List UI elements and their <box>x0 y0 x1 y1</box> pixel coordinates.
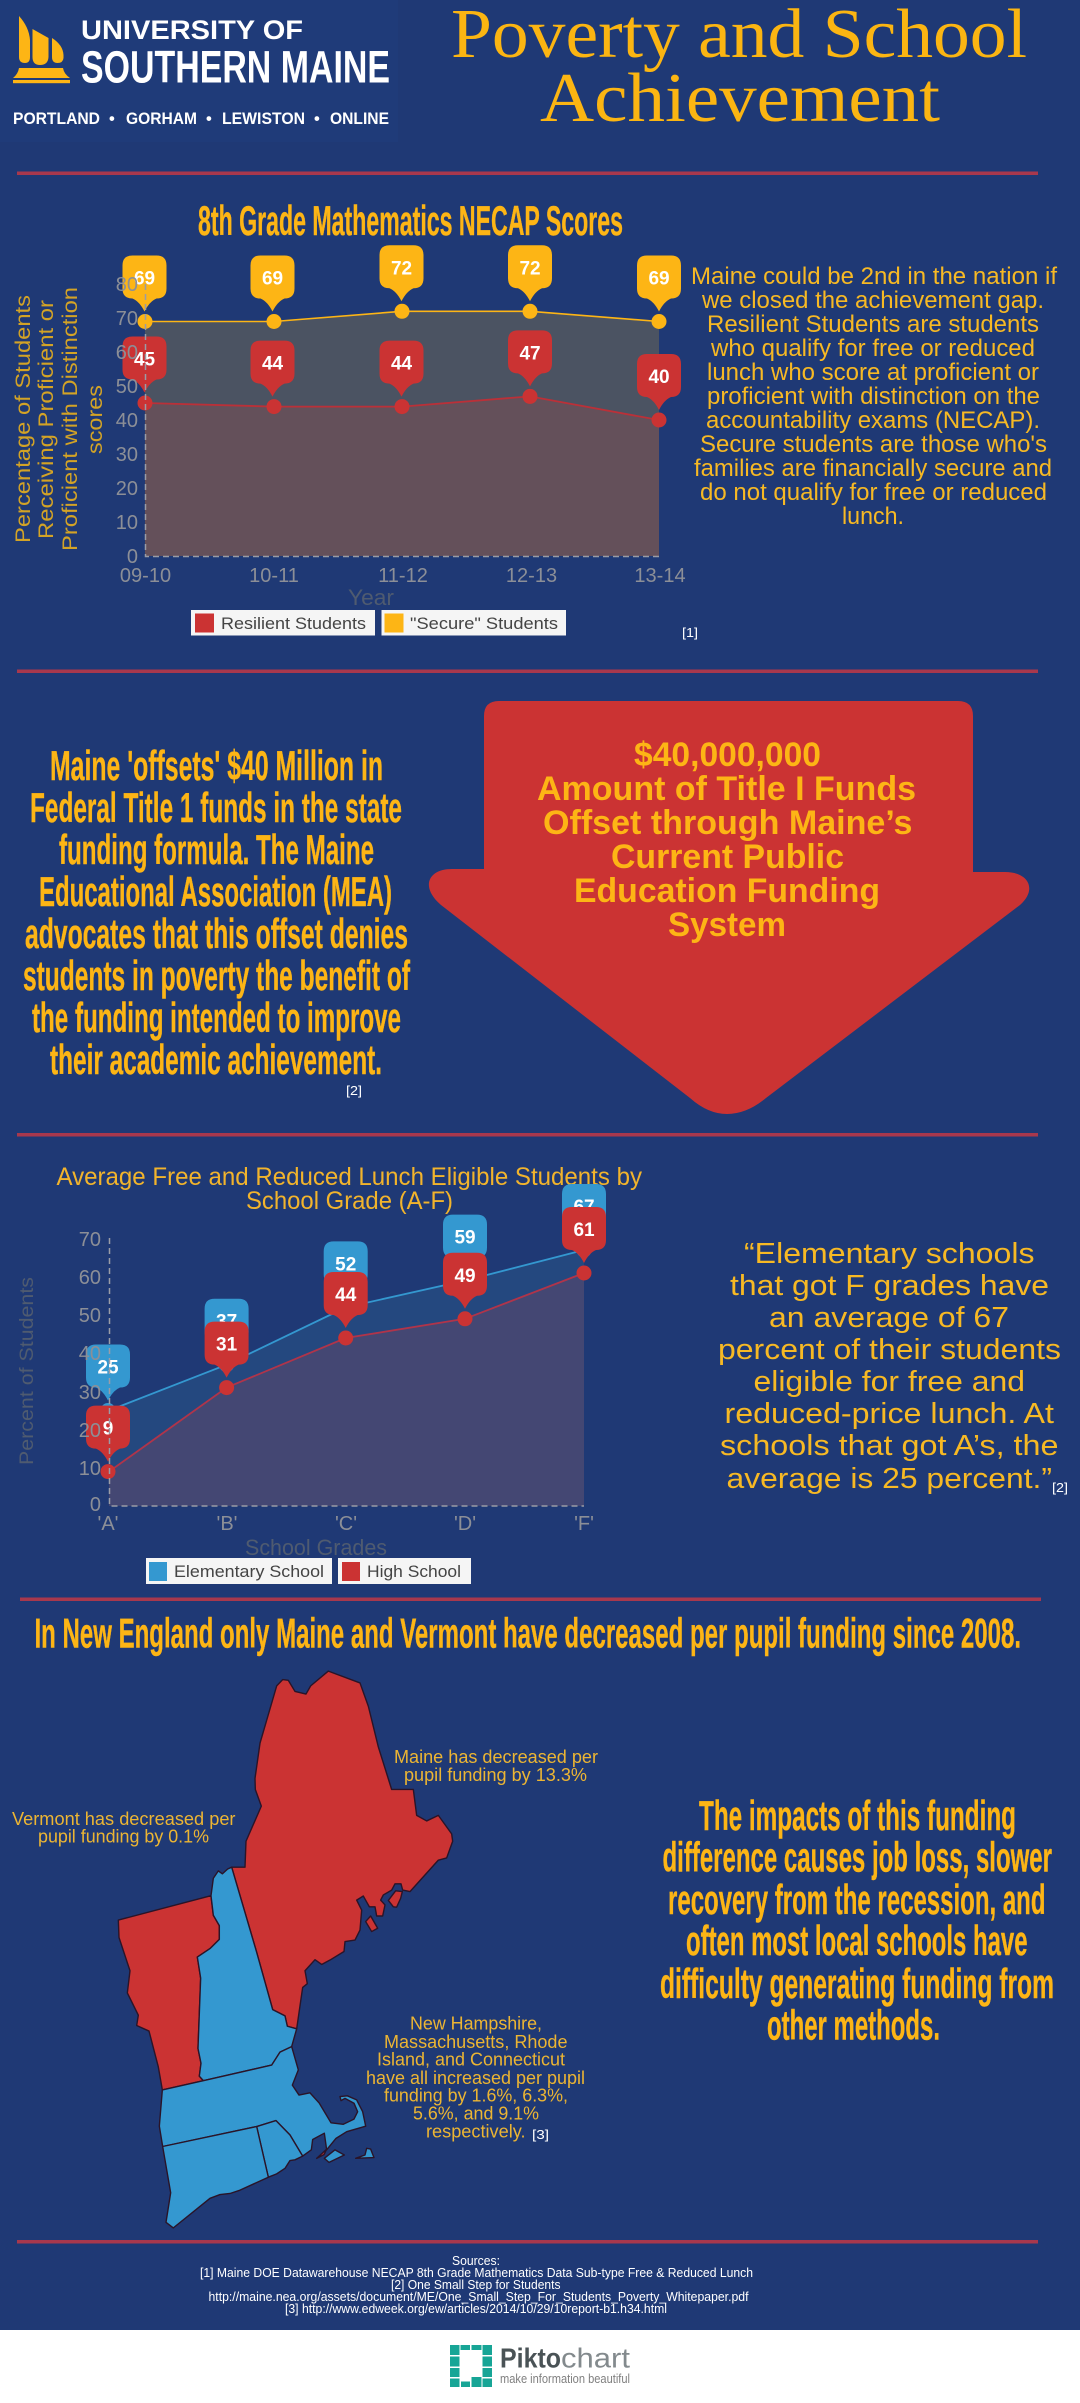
text block: Title 1 offset: Federal Title 1 funds in the state <box>30 784 402 831</box>
sources <box>200 2253 753 2316</box>
map label: other states: have all increased per pupil <box>366 2068 585 2088</box>
map label: Vermont: pupil funding by 0.1% <box>38 1826 209 1846</box>
area chart bands <box>145 311 659 556</box>
high school markers and callouts: 61 <box>573 1220 595 1241</box>
axes and tick labels: 60 <box>79 1267 101 1289</box>
source reference: [3] <box>532 2127 549 2142</box>
text block: funding impacts: other methods. <box>767 2002 940 2048</box>
resilient student markers and callouts <box>122 330 681 428</box>
text block: Title 1 offset: Educational Association (MEA) <box>39 868 392 915</box>
arrow: funds offset callout <box>429 701 1029 1114</box>
text block: elementary schools quote: reduced-price lunch. At <box>724 1398 1054 1430</box>
chart title: Average Free and Reduced Lunch Eligible Students by <box>56 1163 642 1191</box>
panel: NECAP scores chart <box>12 197 698 640</box>
y axis title: Percentage of Students <box>12 295 35 543</box>
text block: elementary schools quote: an average of 67 <box>769 1302 1009 1334</box>
axes and tick labels: 11-12 <box>378 565 428 587</box>
y axis title: Receiving Proficient or <box>35 300 58 539</box>
y axis title: scores <box>84 385 107 454</box>
logo: University of Southern Maine <box>0 0 398 142</box>
axes and tick labels: 20 <box>79 1420 101 1442</box>
axes and tick labels <box>79 1229 594 1535</box>
legend: Elementary School <box>174 1562 324 1581</box>
logo wordmark: SOUTHERN MAINE <box>81 42 390 92</box>
logo wordmark: GORHAM <box>126 110 197 128</box>
text block: resilient students explanation: families are financially secure and <box>694 455 1052 482</box>
secure student markers and callouts: 72 <box>519 258 541 279</box>
axes and tick labels: 10 <box>79 1458 101 1480</box>
logo wordmark: LEWISTON <box>222 110 305 128</box>
x axis title: School Grades <box>245 1535 387 1560</box>
title: Achievement <box>540 60 941 137</box>
text block: resilient students explanation: we closed the achievement gap. <box>701 287 1044 314</box>
sources: [3] http://www.edweek.org/ew/articles/2014/10/29/10report-b1.h34.html <box>285 2301 667 2316</box>
arrow text: Amount of Title I Funds <box>537 770 916 808</box>
axes and tick labels: 'C' <box>335 1513 357 1535</box>
map label: Vermont <box>12 1809 236 1846</box>
text block: resilient students explanation: do not qualify for free or reduced <box>700 479 1047 506</box>
axes and tick labels: 'F' <box>574 1513 594 1535</box>
axes and tick labels: 60 <box>116 342 138 364</box>
axes and tick labels: 12-13 <box>506 565 557 587</box>
arrow text: Education Funding <box>574 872 880 910</box>
source reference: [1] <box>682 625 698 640</box>
map label: other states <box>366 2014 585 2142</box>
elementary school markers and callouts: 25 <box>97 1358 119 1378</box>
text block: funding impacts <box>660 1792 1054 2048</box>
wordmark <box>500 2343 630 2386</box>
legend <box>146 1558 471 1584</box>
axes and tick labels: 10-11 <box>249 565 299 587</box>
source reference: [2] <box>346 1083 362 1098</box>
y axis title <box>12 287 107 551</box>
footer: Piktochart <box>0 2330 1080 2403</box>
axes and tick labels: 50 <box>116 376 138 398</box>
axes and tick labels: 30 <box>116 444 138 466</box>
secure student markers and callouts <box>122 245 681 329</box>
Maine <box>232 1671 453 2029</box>
map label: other states: Massachusetts, Rhode <box>384 2032 568 2052</box>
high school markers and callouts <box>86 1207 606 1479</box>
resilient student markers and callouts: 47 <box>519 343 541 364</box>
wordmark: Pikto <box>500 2343 561 2374</box>
text block: Title 1 offset: advocates that this offset denies <box>25 910 408 957</box>
text block: resilient students explanation: Resilient Students are students <box>707 311 1039 338</box>
text block: Title 1 offset: funding formula. The Maine <box>59 826 374 873</box>
logo wordmark: UNIVERSITY OF <box>81 15 303 45</box>
text block: Title 1 offset: Maine 'offsets' $40 Million in <box>50 742 383 789</box>
map label: Vermont: Vermont has decreased per <box>12 1809 236 1829</box>
axes and tick labels: 70 <box>116 308 138 330</box>
legend: Resilient Students <box>221 614 366 633</box>
Massachusetts <box>159 2047 366 2156</box>
map label: other states: funding by 1.6%, 6.3%, <box>384 2086 568 2106</box>
axes and tick labels: 70 <box>79 1229 101 1251</box>
text block: elementary schools quote: percent of their students <box>718 1334 1061 1366</box>
logo wordmark: • <box>314 110 320 128</box>
logo wordmark: • <box>109 110 115 128</box>
map label: other states: 5.6%, and 9.1% <box>413 2104 539 2124</box>
secure student markers and callouts: 72 <box>391 258 412 279</box>
high school markers and callouts: 9 <box>103 1419 113 1440</box>
source reference: [2] <box>1052 1480 1068 1495</box>
text block: Title 1 offset: the funding intended to improve <box>32 994 401 1041</box>
legend: High School <box>367 1562 461 1581</box>
text block: resilient students explanation: who qualify for free or reduced <box>710 335 1035 362</box>
title <box>451 0 1027 137</box>
text block: elementary schools quote: that got F grades have <box>730 1270 1049 1302</box>
Connecticut <box>163 2127 268 2228</box>
sources: [2] One Small Step for Students <box>391 2277 561 2292</box>
elementary school markers and callouts: 52 <box>335 1254 356 1275</box>
axes and tick labels: 40 <box>116 410 138 432</box>
axes and tick labels: 'D' <box>454 1513 476 1535</box>
map label: other states: New Hampshire, <box>410 2014 542 2034</box>
text block: Title 1 offset <box>23 742 411 1098</box>
arrow text <box>537 736 916 944</box>
axes and tick labels: 10 <box>116 512 138 534</box>
text block: resilient students explanation: lunch. <box>842 503 904 530</box>
resilient student markers and callouts: 44 <box>262 354 283 375</box>
axes and tick labels: 30 <box>79 1382 101 1404</box>
islands <box>317 2148 374 2162</box>
secure student markers and callouts: 69 <box>134 268 155 290</box>
text block: resilient students explanation: lunch who score at proficient or <box>707 359 1039 386</box>
axes and tick labels: 'A' <box>98 1513 118 1535</box>
Rhode Island <box>257 2121 303 2177</box>
text block: elementary schools quote: average is 25 percent.” <box>726 1463 1052 1495</box>
high school markers and callouts: 44 <box>335 1285 357 1306</box>
resilient student markers and callouts: 44 <box>391 354 412 375</box>
New Hampshire <box>197 1867 297 2081</box>
legend: "Secure" Students <box>410 614 558 633</box>
resilient student markers and callouts: 45 <box>134 350 155 370</box>
icon: Piktochart grid <box>450 2345 492 2387</box>
axes and tick labels: 20 <box>116 478 138 500</box>
area chart bands <box>109 1250 584 1506</box>
panel: free and reduced lunch chart <box>17 1163 642 1584</box>
arrow text: Offset through Maine’s <box>543 804 912 842</box>
arrow text: $40,000,000 <box>634 736 821 774</box>
map label: Maine <box>394 1747 598 1785</box>
text block: Title 1 offset: students in poverty the benefit of <box>23 952 411 999</box>
map label: other states: respectively. <box>426 2122 526 2142</box>
axes and tick labels: 0 <box>90 1494 101 1516</box>
text block: resilient students explanation: Secure students are those who's <box>700 431 1047 458</box>
x axis title: Year <box>348 585 394 610</box>
text block: resilient students explanation: proficient with distinction on the <box>707 383 1040 410</box>
chart title <box>56 1163 642 1215</box>
axes and tick labels: 40 <box>79 1343 101 1365</box>
y axis title: Proficient with Distinction <box>59 287 82 551</box>
icon: column sail <box>13 16 70 83</box>
logo wordmark: PORTLAND <box>13 110 100 128</box>
axes and tick labels: 80 <box>116 274 138 296</box>
text block: elementary schools quote: “Elementary schools <box>744 1238 1034 1270</box>
elementary school markers and callouts <box>86 1184 606 1418</box>
Vermont <box>118 1896 219 2090</box>
text block: elementary schools quote: eligible for free and <box>754 1366 1025 1398</box>
chart title: School Grade (A-F) <box>246 1187 453 1215</box>
text block: elementary schools quote <box>718 1238 1068 1495</box>
wordmark: make information beautiful <box>500 2372 630 2386</box>
elementary school markers and callouts: 59 <box>454 1228 476 1249</box>
sources: [1] Maine DOE Datawarehouse NECAP 8th Grade Mathematics Data Sub-type Free & Reduced Lunch <box>200 2265 753 2280</box>
axes and tick labels: 'B' <box>217 1513 237 1535</box>
axes and tick labels: 13-14 <box>634 565 686 587</box>
elementary school markers and callouts: 67 <box>573 1197 595 1218</box>
secure student markers and callouts: 69 <box>262 268 283 290</box>
y axis title: Percent of Students <box>17 1277 38 1465</box>
legend <box>191 610 566 636</box>
arrow text: Current Public <box>611 838 844 876</box>
axes and tick labels: 0 <box>127 546 138 568</box>
text block: resilient students explanation: Maine could be 2nd in the nation if <box>691 263 1057 290</box>
map label: other states: Island, and Connecticut <box>377 2050 565 2070</box>
map label: Maine: pupil funding by 13.3% <box>404 1765 587 1785</box>
secure student markers and callouts: 69 <box>648 268 670 290</box>
logo wordmark: • <box>206 110 212 128</box>
sources: http://maine.nea.org/assets/document/ME/One_Small_Step_For_Students_Poverty_Whitepaper.pdf <box>208 2289 749 2304</box>
chart title: 8th Grade Mathematics NECAP Scores <box>198 197 623 244</box>
text block: elementary schools quote: schools that got A’s, the <box>720 1430 1058 1462</box>
wordmark: chart <box>561 2343 630 2374</box>
resilient student markers and callouts: 40 <box>648 367 670 388</box>
text block: resilient students explanation: accountability exams (NECAP). <box>706 407 1040 434</box>
high school markers and callouts: 31 <box>216 1335 238 1356</box>
elementary school markers and callouts: 37 <box>216 1312 237 1333</box>
high school markers and callouts: 49 <box>454 1266 476 1287</box>
logo wordmark: ONLINE <box>330 110 389 128</box>
axes and tick labels: 50 <box>79 1305 101 1327</box>
logo wordmark <box>13 15 390 128</box>
text block: Title 1 offset: their academic achievement. <box>50 1036 382 1083</box>
axes and tick labels <box>116 274 686 587</box>
map: New England states <box>118 1671 453 2228</box>
sources: Sources: <box>452 2253 500 2268</box>
map label: Maine: Maine has decreased per <box>394 1747 598 1767</box>
arrow text: System <box>668 906 786 944</box>
text block: resilient students explanation <box>691 263 1057 530</box>
axes and tick labels: 09-10 <box>120 565 171 587</box>
